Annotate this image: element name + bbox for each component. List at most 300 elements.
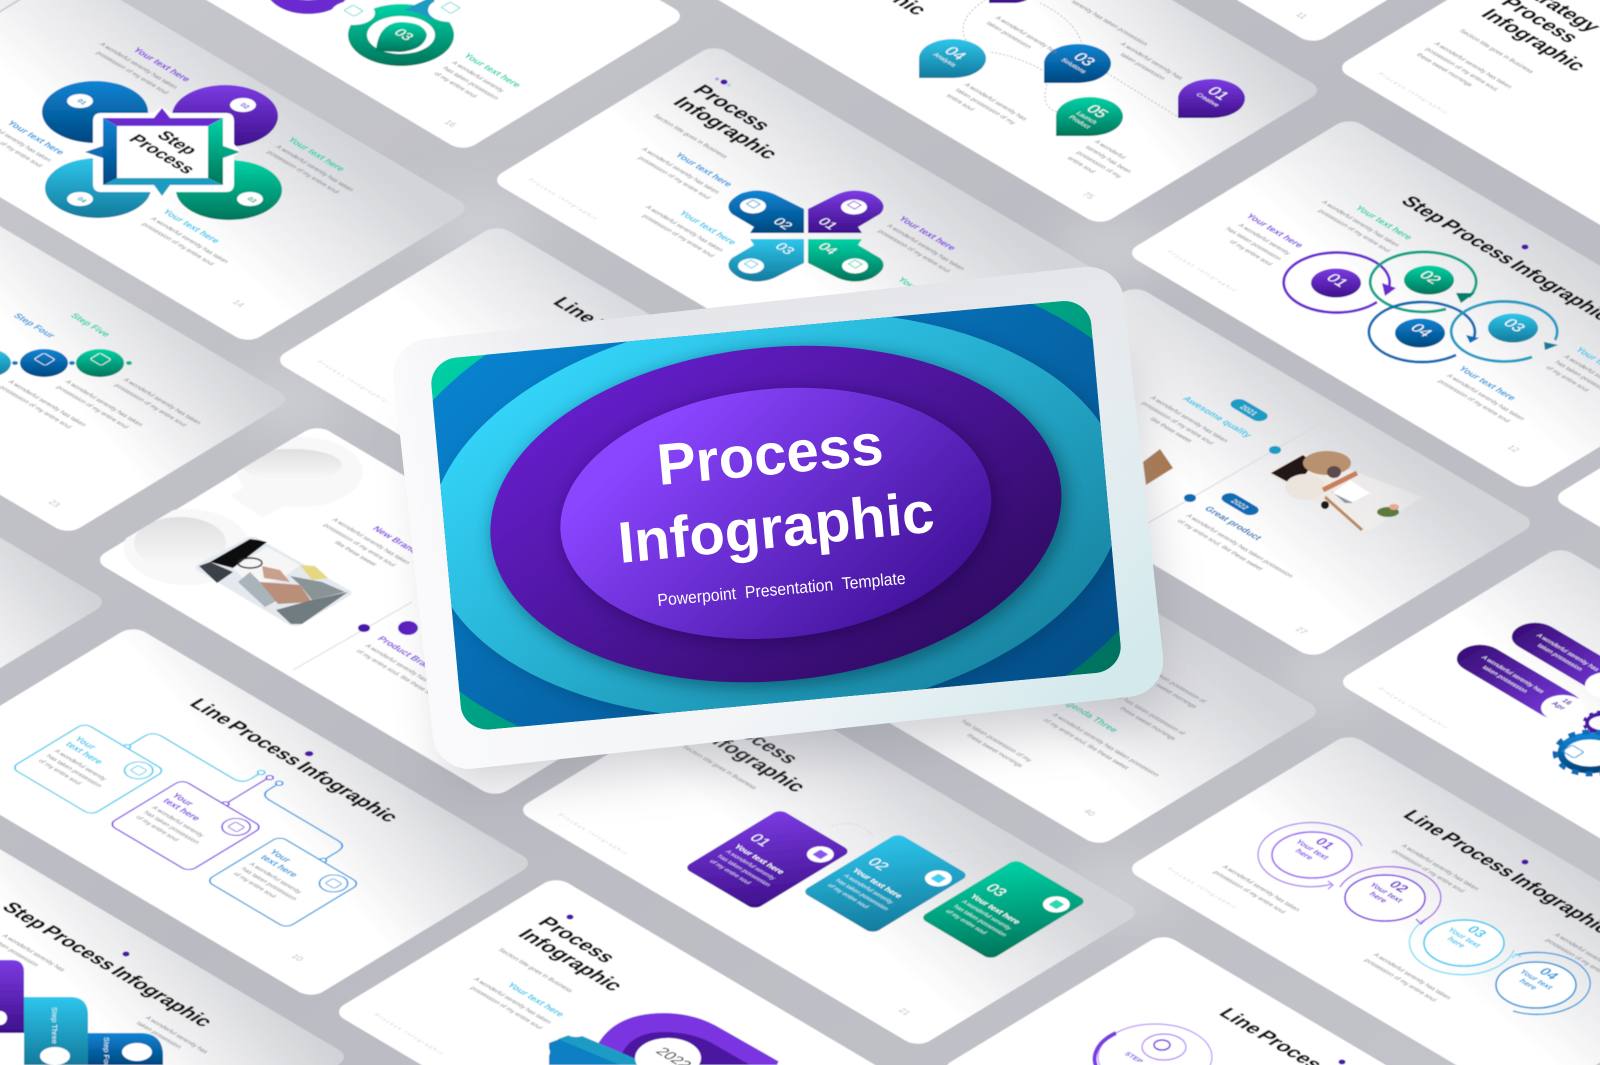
connector dots: [12, 361, 132, 365]
box purple: of my entire soul: [134, 815, 180, 843]
spike left blue: [85, 146, 103, 158]
block purple: of my entire soul: [1227, 239, 1274, 267]
ring 03 cyan: [1451, 301, 1558, 361]
box cyan: [11, 723, 165, 815]
pill 2022: [1218, 491, 1262, 517]
circle text 02: 02: [1386, 878, 1413, 895]
step circle blue: [20, 349, 68, 377]
slide: line process right background: [1125, 733, 1600, 1065]
pin 03: [1044, 44, 1111, 83]
bottom left step process: [0, 899, 217, 1065]
subtitle: Powerpoint Presentation Template: [657, 569, 906, 610]
slide: blank left background: [0, 364, 109, 738]
timeline dot cyan: [1269, 446, 1281, 454]
year badge: [635, 1038, 701, 1065]
pill upper: taken possession: [1535, 643, 1584, 672]
pills slide: [1376, 617, 1600, 774]
embossed two stem: [92, 350, 99, 378]
slide: 2022 process background: [332, 876, 958, 1065]
line process right: [1165, 807, 1600, 1014]
step four label: Step Four: [11, 312, 58, 339]
pill 2022: 2022: [1229, 498, 1251, 511]
slide: number 75 background: [698, 0, 1324, 226]
title: Step Process Infographic: [0, 899, 217, 1030]
blue block: possession of my entire soul: [468, 986, 544, 1030]
circle text 02: here: [1367, 891, 1390, 904]
cyan slice: [404, 0, 435, 20]
block purple: [0, 960, 24, 1033]
teal band: [549, 1035, 635, 1065]
corner base: [429, 298, 1123, 732]
card 01 purple: A wonderful serenity: [724, 849, 778, 881]
description 3: A wonderful serenity has taken: [1371, 952, 1453, 1001]
title: Infographic: [1476, 6, 1590, 74]
description upper: A wonderful serenity has: [993, 15, 1059, 55]
description four: possession of my entire soul: [54, 385, 130, 430]
description: new brand: like these sweet: [332, 540, 378, 567]
badge number 02: 02: [238, 102, 251, 110]
donut teardrop: [376, 22, 427, 52]
block blue: A wonderful serenity has taken: [1445, 373, 1526, 422]
block blue: possession of my entire soul: [636, 156, 712, 200]
accent dot: [1522, 244, 1528, 250]
subtitle: Section title goes in Business: [496, 947, 574, 994]
connector end nodes: [122, 717, 371, 865]
description: product brand: A wonderful serenity has taken: [363, 643, 445, 692]
slide: butterfly process background: [490, 44, 1116, 418]
accent dot: [1338, 1060, 1346, 1064]
description one: possession of my entire soul: [1139, 401, 1215, 446]
block blue: [85, 1033, 163, 1065]
slide: number 27 background: [911, 285, 1537, 659]
page 12: 12: [1505, 443, 1522, 454]
slide: number 16 background: [61, 0, 687, 152]
connector blue: [235, 784, 365, 861]
card 02 cyan: has taken possession: [834, 878, 890, 912]
block cyan: [635, 196, 739, 259]
number 03: 03: [772, 240, 799, 257]
block purple: A wonderful serenity: [1236, 223, 1293, 256]
title line 2: Infographic: [615, 480, 937, 576]
date text: Apr: [1549, 700, 1568, 711]
slide: number 12 background: [1125, 117, 1600, 491]
description under 05: [1065, 139, 1142, 185]
accent dot: [566, 914, 574, 920]
page 11: 11: [1293, 11, 1310, 20]
blue ellipse: [432, 304, 1120, 727]
agenda three description: of my entire soul, like these sweet: [1041, 718, 1130, 771]
circle text 04: [1509, 960, 1570, 996]
page 10: 10: [289, 952, 306, 963]
description right: A wonderful serenity has: [143, 1015, 209, 1055]
number 01: 01: [815, 215, 842, 232]
pin text 05: Launch: [1074, 111, 1099, 125]
icon marks: [34, 353, 111, 366]
agenda three heading: Agenda Three: [1058, 697, 1120, 734]
box cyan: has taken possession: [44, 754, 104, 789]
page 21: 21: [896, 1006, 913, 1017]
big number slide content: [124, 437, 452, 702]
block purple: [876, 215, 980, 277]
top description: these sweet mornings: [1139, 674, 1198, 709]
description under 04: entire soul: [944, 93, 976, 112]
block blue: [1436, 365, 1540, 427]
description right: taken possession: [134, 1021, 183, 1050]
label right: possession of my entire soul: [265, 150, 341, 195]
timeline dot: [358, 624, 370, 632]
footer: Process Infographic: [526, 178, 600, 222]
pin text 04: 04: [940, 45, 970, 63]
inner circles: [1272, 832, 1576, 1008]
text block: [432, 52, 523, 107]
center label: Step: [153, 128, 202, 157]
slide 75 pins: [817, 0, 1245, 185]
pill upper: [1502, 617, 1600, 702]
description 1: A wonderful serenity has taken: [1220, 864, 1302, 913]
pin text 05: [1067, 102, 1114, 130]
label right: [265, 136, 369, 198]
subtitle: Section title goes in Business: [651, 113, 729, 160]
accent dots: [715, 78, 731, 86]
circle text 02: [1359, 873, 1420, 909]
circle text 01: 01: [1312, 835, 1339, 852]
block blue: possession of my entire soul: [1436, 379, 1512, 424]
dotted connectors: [963, 0, 1178, 117]
description top: serenity has taken possession: [1069, 0, 1150, 47]
block blue: A wonderful serenity has taken: [640, 147, 721, 195]
circle text 01: [1285, 830, 1346, 866]
label right: A wonderful serenity has taken: [274, 144, 355, 193]
label bottom: A wonderful serenity has taken: [149, 216, 230, 265]
card 02 cyan: A wonderful serenity: [842, 873, 896, 905]
slide 16 diagram: [272, 0, 523, 107]
frame bottom cyan: [103, 178, 223, 185]
quadrant icon badges: [738, 198, 868, 274]
central title card: [394, 266, 1164, 769]
butterfly process diagram: [526, 78, 980, 313]
block cyan: of my entire soul: [1544, 365, 1590, 393]
page 16: 16: [442, 118, 459, 129]
description upper: taken possession: [984, 21, 1033, 50]
footer: Process Infographic: [556, 813, 630, 857]
block cyan: [24, 997, 88, 1065]
block green: A wonderful serenity has taken: [1320, 200, 1401, 248]
description one: like these sweet: [1148, 417, 1193, 444]
label: product brand: Product Brand: [375, 635, 440, 673]
card 02 cyan: of my entire soul: [826, 883, 870, 909]
block blue: Your text here: [1456, 365, 1518, 402]
description 1: possession of my entire soul: [1211, 870, 1287, 915]
embossed numerals clipped to the slide: [124, 446, 342, 563]
step circle green: [76, 349, 124, 377]
teal band top: [558, 1033, 650, 1065]
label: new brand: New Brand: [370, 525, 421, 555]
circle text 03: here: [1445, 936, 1468, 949]
pin 04: [919, 39, 986, 78]
description under 04: taken possession of my: [953, 88, 1018, 126]
label top: Your text here: [131, 46, 193, 83]
pin text 03: [1059, 49, 1102, 75]
blue block: Your text here: [505, 981, 567, 1018]
gear purple: [1584, 712, 1600, 734]
slide: step process bottom left background: [0, 819, 351, 1065]
pin text 03: 03: [1069, 51, 1099, 69]
quadrant 03 cyan: [728, 239, 804, 282]
date badge lower: [1541, 695, 1585, 721]
description: new brand: [312, 517, 412, 577]
card 01 purple: Your text here: [732, 843, 787, 876]
card 02 cyan: Your text here: [850, 867, 905, 900]
box purple: has taken possession: [142, 810, 201, 845]
description two: of my entire soul, like these sweet: [1175, 519, 1264, 572]
card 03 green: of my entire soul: [944, 909, 988, 935]
box blue: has taken possession: [239, 867, 299, 902]
subtitle: Section title goes in Business: [1457, 28, 1535, 75]
box cyan: A wonderful serenity: [52, 749, 109, 782]
quadrant 01 purple: [808, 190, 884, 233]
slide: line process bottom background: [939, 933, 1565, 1065]
label right: Your text here: [285, 136, 347, 173]
right description: serenity has taken possession of: [1100, 685, 1186, 736]
petal 03 green: [176, 160, 282, 220]
page 27: 27: [1293, 625, 1310, 636]
2022 slide: [372, 914, 803, 1065]
photo: coworkers: [1270, 451, 1423, 530]
blue block: A wonderful serenity has taken: [472, 977, 553, 1025]
block purple: Your text here: [1244, 212, 1306, 249]
accent dot: [303, 750, 315, 757]
icon badges: [331, 0, 472, 25]
gutter highlights: [240, 195, 1380, 920]
slide: number 23 background: [0, 161, 292, 535]
dashed arcs: [832, 824, 990, 858]
box purple: [109, 779, 263, 872]
slide: strategy background: [1335, 0, 1600, 306]
date text: [1549, 695, 1576, 711]
connector cyan: [126, 720, 260, 800]
block cyan: A wonderful serenity has taken: [644, 205, 725, 253]
slide: small right background: [1551, 362, 1600, 736]
pin text 01: 01: [1203, 85, 1233, 103]
number 02: 02: [770, 215, 797, 232]
title: Line Process Infographic: [184, 696, 403, 825]
ring 03 cyan: 03: [1499, 317, 1529, 335]
footer: Process Infographic: [1376, 687, 1450, 731]
step process diagram (slide 14): [0, 33, 369, 270]
pill lower: A wonderful serenity has: [1480, 655, 1546, 694]
white star frame: [84, 107, 241, 197]
description under 05: serenity has been: [1083, 145, 1133, 174]
pill upper: A wonderful serenity has: [1535, 633, 1600, 672]
slide 21 title and cards: [556, 715, 1087, 960]
block green: possession of my entire soul: [1316, 209, 1392, 253]
right description: these sweet mornings: [1118, 706, 1177, 741]
description 3: possession of my entire soul: [1362, 958, 1438, 1003]
description four: A wonderful serenity has taken: [63, 379, 145, 428]
ring: [1098, 1024, 1212, 1065]
spike right green: [223, 146, 240, 158]
timeline line: [1110, 415, 1335, 545]
slide 12 step rings: [1165, 191, 1600, 427]
slide: pills background: [1336, 546, 1600, 920]
pill lower: taken possession: [1480, 665, 1529, 694]
center white panel: [117, 126, 208, 178]
title: Infographic: [696, 727, 810, 795]
embossed two hole: [242, 449, 342, 481]
box cyan: of my entire soul: [36, 758, 83, 786]
box blue: A wonderful serenity: [247, 862, 304, 895]
purple ring arc: [272, 0, 344, 7]
block purple: has taken possession: [1224, 226, 1283, 262]
description: these sweet mornings: [1414, 52, 1474, 88]
description under 05: A wonderful: [1092, 139, 1127, 160]
title: Process: [533, 914, 620, 966]
step five label: Step Five: [68, 312, 113, 338]
description 2: A wonderful serenity has taken: [1399, 843, 1481, 892]
ring 04 blue: 04: [1406, 322, 1436, 340]
spike bottom cyan: [154, 185, 170, 196]
center label: Process: [125, 131, 200, 177]
description right: A wonderful serenity has: [1118, 42, 1184, 81]
pin text 05: Product: [1067, 115, 1092, 130]
pill lower: [1447, 639, 1591, 724]
slide: hidden line process background: [273, 224, 899, 598]
circle text 01: here: [1293, 848, 1316, 861]
description under 04: A wonderful serenity has: [962, 82, 1028, 122]
outer arcs: [1258, 823, 1590, 1014]
description under 05: possession of my: [1074, 150, 1124, 180]
slide: big number background: [93, 424, 719, 798]
text block: A wonderful serenity: [450, 60, 506, 94]
card 03 green: A wonderful serenity: [960, 899, 1014, 931]
page 14: 14: [230, 298, 247, 309]
description five: possession of my entire soul: [112, 383, 188, 428]
embossed two: [237, 437, 363, 507]
pin top purple: [989, 0, 1039, 3]
title: Process: [716, 715, 803, 767]
card 01 purple: has taken possession: [716, 854, 772, 888]
footer: Process Infographic: [1165, 250, 1239, 294]
box blue: text here: [258, 854, 300, 879]
description: new brand: possession of my entire soul: [321, 523, 397, 568]
description right: taken possession: [1118, 52, 1167, 81]
circle text 04: 04: [1536, 965, 1563, 982]
text block: of my entire soul: [432, 71, 478, 99]
gear blue: [1555, 732, 1600, 774]
footer: Process Infographic: [372, 1013, 446, 1057]
card 03 green: Your text here: [968, 893, 1023, 926]
box cyan: text here: [63, 741, 105, 766]
inner circle: [1142, 1034, 1186, 1060]
quadrant 02 blue: [728, 190, 804, 233]
purple ellipse shadow: [482, 338, 1076, 697]
block cyan: Your text here: [677, 209, 739, 246]
cyan ellipse shadow: [443, 318, 1113, 716]
slide 10 line process: [11, 669, 446, 930]
pin text 04: Analysis: [931, 52, 958, 68]
step three label: Step Three: [50, 1007, 59, 1044]
label bottom: Your text here: [160, 208, 222, 245]
box blue: Your: [267, 848, 294, 864]
footer: Process Infographic: [1376, 72, 1450, 116]
block cyan: possession of my entire soul: [640, 214, 716, 258]
lilac ellipse: [560, 388, 992, 639]
card 02 cyan: 02: [864, 856, 893, 873]
slide 27 content: [1110, 395, 1423, 584]
green donut: [348, 4, 454, 66]
circle text 04: Your text: [1517, 968, 1555, 991]
purple arch: [594, 1013, 785, 1065]
slide 23 step circles: [0, 312, 203, 433]
block green heading: Your text here: [895, 276, 957, 313]
badge three: [40, 1047, 70, 1065]
cover artwork: [431, 301, 1121, 730]
accent dot: [1522, 860, 1528, 864]
strategy slide content: [1376, 0, 1600, 116]
search icon: [1154, 1040, 1170, 1050]
label top: [89, 33, 193, 96]
description under 04: [944, 82, 1028, 133]
frame left blue: [103, 118, 117, 185]
description: product brand: of my entire soul, like these sweet: [354, 649, 443, 702]
heading awesome quality: Awesome quality: [1180, 395, 1255, 439]
card 01 purple: [683, 809, 851, 910]
photo: book: [1143, 449, 1173, 485]
label top: A wonderful serenity has taken: [98, 42, 179, 90]
description five: A wonderful serenity has taken: [121, 377, 203, 426]
slide: number 40 background: [697, 473, 1323, 847]
quadrant badge icons: [745, 200, 862, 268]
pin 05: [1056, 97, 1123, 136]
number 03: 03: [391, 26, 418, 43]
petal 04 cyan: [45, 158, 151, 218]
ring 04 blue: [1369, 302, 1479, 362]
arc arrowheads: [1328, 881, 1521, 958]
block purple: possession of my entire soul: [876, 229, 952, 274]
block purple: [1214, 212, 1307, 267]
line process bottom: [1095, 1005, 1432, 1065]
card 03 green: 03: [982, 882, 1011, 899]
step label: STEP: [1122, 1051, 1144, 1065]
badge number 03: 03: [245, 196, 258, 204]
badge four: [122, 1043, 152, 1061]
ring 02 green: [1370, 252, 1476, 312]
blue block: [463, 968, 567, 1031]
pin text 03: Solutions: [1059, 58, 1088, 75]
page 75: 75: [1080, 190, 1097, 201]
ring 02 green: 02: [1415, 269, 1445, 287]
description one: [1130, 395, 1230, 455]
agenda three description: A wonderful serenity has taken possession: [1050, 712, 1161, 778]
description: new brand: A wonderful serenity has taken: [330, 517, 412, 566]
quadrant petals: [728, 190, 884, 282]
label bottom: [140, 208, 244, 270]
description two: A wonderful serenity has taken possession: [1184, 513, 1295, 579]
card 01 purple: 01: [746, 832, 775, 849]
pin text 04: [931, 43, 972, 68]
block blue: [631, 138, 735, 201]
card 03 green: has taken possession: [952, 904, 1008, 938]
footer: Process Infographic: [1165, 867, 1239, 911]
petal 01 blue: [42, 81, 148, 143]
description 2: possession of my entire soul: [1390, 849, 1466, 894]
connector purple: [224, 778, 268, 804]
ring 01 purple: 01: [1322, 272, 1352, 290]
thick arc: [1095, 1033, 1116, 1065]
description: [1414, 41, 1514, 101]
box purple: text here: [161, 797, 203, 822]
block green: Your text here: [1353, 204, 1415, 241]
